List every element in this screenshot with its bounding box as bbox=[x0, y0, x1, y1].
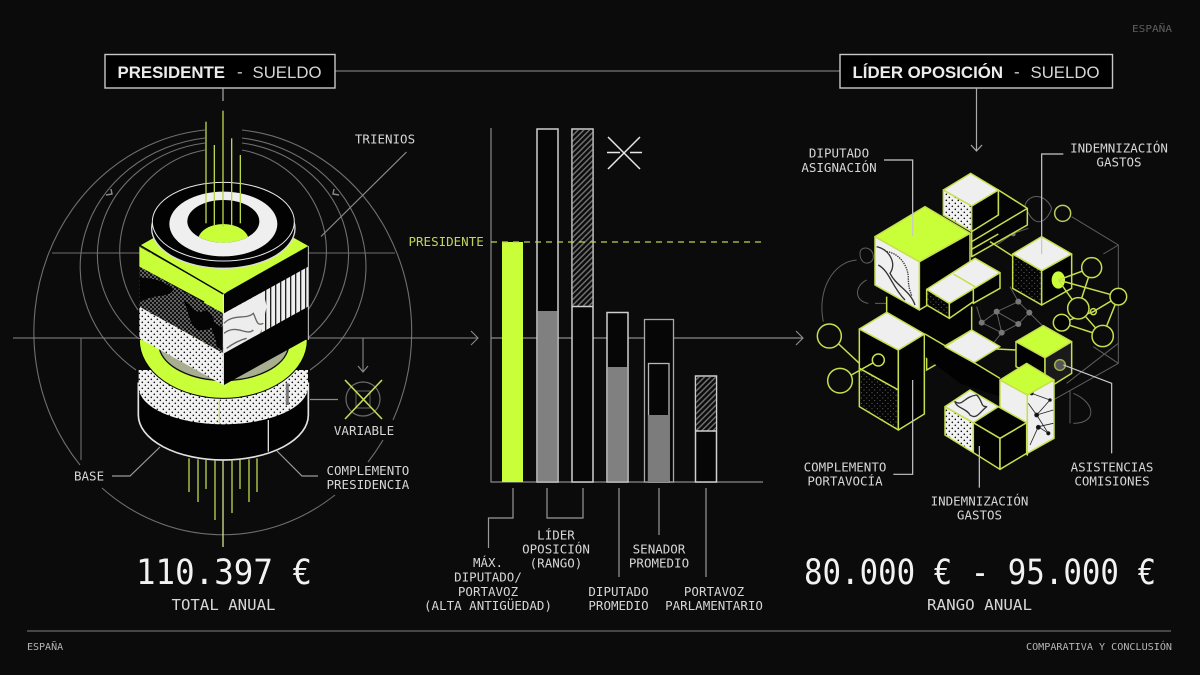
cube: top back bbox=[943, 173, 1027, 257]
label: complemento presidencia bbox=[277, 451, 410, 492]
label: indemnizacion gastos top: INDEMNIZACIÓN bbox=[1070, 140, 1168, 156]
bar: lider oposicion (max) bbox=[572, 129, 593, 482]
bar leader lines bbox=[488, 488, 706, 577]
guide rings and axes behind cylinder bbox=[13, 130, 478, 535]
black connecting mass bbox=[887, 263, 972, 345]
label: max diputado portavoz: DIPUTADO/ bbox=[454, 570, 522, 584]
label: lider oposicion rango bbox=[522, 528, 590, 570]
lime network bbox=[1053, 205, 1127, 347]
label: lider oposicion rango: LÍDER bbox=[537, 528, 575, 542]
heading: presidente sueldo: SUELDO bbox=[252, 63, 322, 82]
label: indemnizacion gastos top: GASTOS bbox=[1096, 154, 1142, 170]
label: complemento presidencia: COMPLEMENTO bbox=[326, 463, 409, 478]
disc bbox=[152, 188, 295, 268]
cube: lime small right bbox=[1016, 326, 1072, 390]
label: complemento portavocia: PORTAVOCÍA bbox=[807, 474, 883, 488]
label: max diputado portavoz: MÁX. bbox=[473, 555, 503, 570]
footer left: ESPAÑA bbox=[27, 640, 63, 653]
block: middle double bbox=[927, 258, 1000, 318]
block: right face bbox=[224, 246, 308, 313]
caption: rango anual: RANGO ANUAL bbox=[927, 596, 1032, 614]
bar: portavoz parlamentario bbox=[696, 376, 716, 482]
bar: senador promedio bbox=[644, 320, 674, 482]
label: max diputado portavoz: (ALTA ANTIGÜEDAD) bbox=[424, 597, 552, 613]
label: diputado asignacion: ASIGNACIÓN bbox=[801, 160, 877, 175]
icon: variable crossed coin bbox=[310, 380, 394, 438]
heading: presidente sueldo bbox=[105, 54, 335, 101]
bar: diputado promedio bbox=[607, 312, 628, 482]
label: indemnizacion gastos top bbox=[1070, 140, 1168, 170]
label: asistencias comisiones: ASISTENCIAS bbox=[1071, 460, 1153, 474]
heading: lider oposicion sueldo: LÍDER OPOSICIÓN bbox=[852, 63, 1003, 82]
bar: lider oposicion (min) bbox=[537, 129, 558, 482]
label: senador promedio: PROMEDIO bbox=[629, 556, 689, 570]
label: senador promedio: SENADOR bbox=[633, 542, 686, 556]
heading: lider oposicion sueldo: SUELDO bbox=[1030, 63, 1100, 82]
bottom lime lines bbox=[189, 458, 257, 547]
cylinder: base layer bbox=[138, 383, 308, 460]
cylinder: dotted layer bbox=[139, 370, 308, 424]
label: diputado promedio: PROMEDIO bbox=[588, 598, 649, 613]
background grey net bbox=[822, 197, 1118, 423]
label: max diputado portavoz: PORTAVOZ bbox=[458, 584, 519, 599]
cube: bottom dotted marble bbox=[945, 390, 998, 453]
label: diputado asignacion: DIPUTADO bbox=[809, 146, 869, 160]
label: base: BASE bbox=[74, 468, 104, 484]
illustration: opposition leader isometric blocks bbox=[817, 154, 1127, 488]
label: lider oposicion rango: OPOSICIÓN bbox=[522, 542, 590, 556]
top-right country tag: ESPAÑA bbox=[1132, 22, 1172, 35]
bar chart bbox=[408, 128, 803, 482]
label: diputado promedio bbox=[588, 584, 649, 613]
label: indemnizacion gastos bottom: INDEMNIZACIÓN bbox=[931, 494, 1028, 508]
label: asistencias comisiones: COMISIONES bbox=[1074, 474, 1150, 488]
cube: big lime diputado bbox=[875, 207, 970, 310]
heading: lider oposicion sueldo bbox=[840, 54, 1112, 88]
label: trienios: TRIENIOS bbox=[355, 132, 415, 146]
heading: presidente sueldo: - bbox=[237, 62, 243, 82]
connector between header boxes bbox=[335, 70, 840, 72]
big number: president: 110.397 € bbox=[136, 553, 312, 593]
label: portavoz parlamentario bbox=[665, 584, 763, 613]
illustration: president salary cylinder bbox=[138, 111, 308, 547]
cube: tall complemento bbox=[817, 312, 924, 430]
caption: total anual: TOTAL ANUAL bbox=[172, 596, 276, 614]
top lime lines bbox=[206, 111, 240, 227]
big number: opposition leader range: 80.000 € - 95.000 € bbox=[804, 553, 1156, 593]
cube: lime with network face bbox=[1000, 363, 1054, 455]
label: asistencias comisiones bbox=[1071, 460, 1153, 488]
black band with white diamond bbox=[925, 330, 1017, 397]
cube: bottom black bbox=[973, 407, 1027, 469]
arrow: down to blocks bbox=[971, 88, 982, 151]
block: left face bbox=[139, 247, 223, 312]
cube: right top with lime port bbox=[1013, 237, 1072, 305]
label: trienios bbox=[321, 132, 415, 236]
leader lines bbox=[884, 154, 1112, 488]
label: indemnizacion gastos bottom bbox=[931, 494, 1028, 522]
heading: presidente sueldo: PRESIDENTE bbox=[118, 63, 225, 82]
label: lider oposicion rango: (RANGO) bbox=[530, 556, 582, 570]
label: portavoz parlamentario: PORTAVOZ bbox=[684, 584, 745, 599]
label: complemento presidencia: PRESIDENCIA bbox=[326, 477, 410, 492]
label: complemento portavocia: COMPLEMENTO bbox=[804, 460, 886, 474]
footer rule bbox=[27, 630, 1171, 632]
icon: variable crossed coin: VARIABLE bbox=[334, 423, 394, 438]
label: complemento portavocia bbox=[804, 460, 886, 488]
icon: crossed lines bbox=[607, 137, 642, 169]
reference line: presidente: PRESIDENTE bbox=[408, 234, 484, 249]
label: indemnizacion gastos bottom: GASTOS bbox=[957, 508, 1002, 522]
bar: presidente bbox=[502, 242, 523, 482]
block: lime top bbox=[139, 198, 308, 294]
label: base bbox=[74, 447, 160, 484]
label: diputado promedio: DIPUTADO bbox=[588, 584, 649, 599]
label: max diputado portavoz bbox=[424, 555, 552, 613]
cylinder: lime ring bbox=[139, 290, 307, 398]
label: portavoz parlamentario: PARLAMENTARIO bbox=[665, 598, 763, 613]
heading: lider oposicion sueldo: - bbox=[1014, 62, 1020, 82]
label: diputado asignacion bbox=[801, 146, 877, 175]
label: senador promedio bbox=[629, 542, 689, 570]
axes and connector bbox=[491, 128, 803, 482]
footer right: COMPARATIVA Y CONCLUSIÓN bbox=[1026, 640, 1172, 653]
